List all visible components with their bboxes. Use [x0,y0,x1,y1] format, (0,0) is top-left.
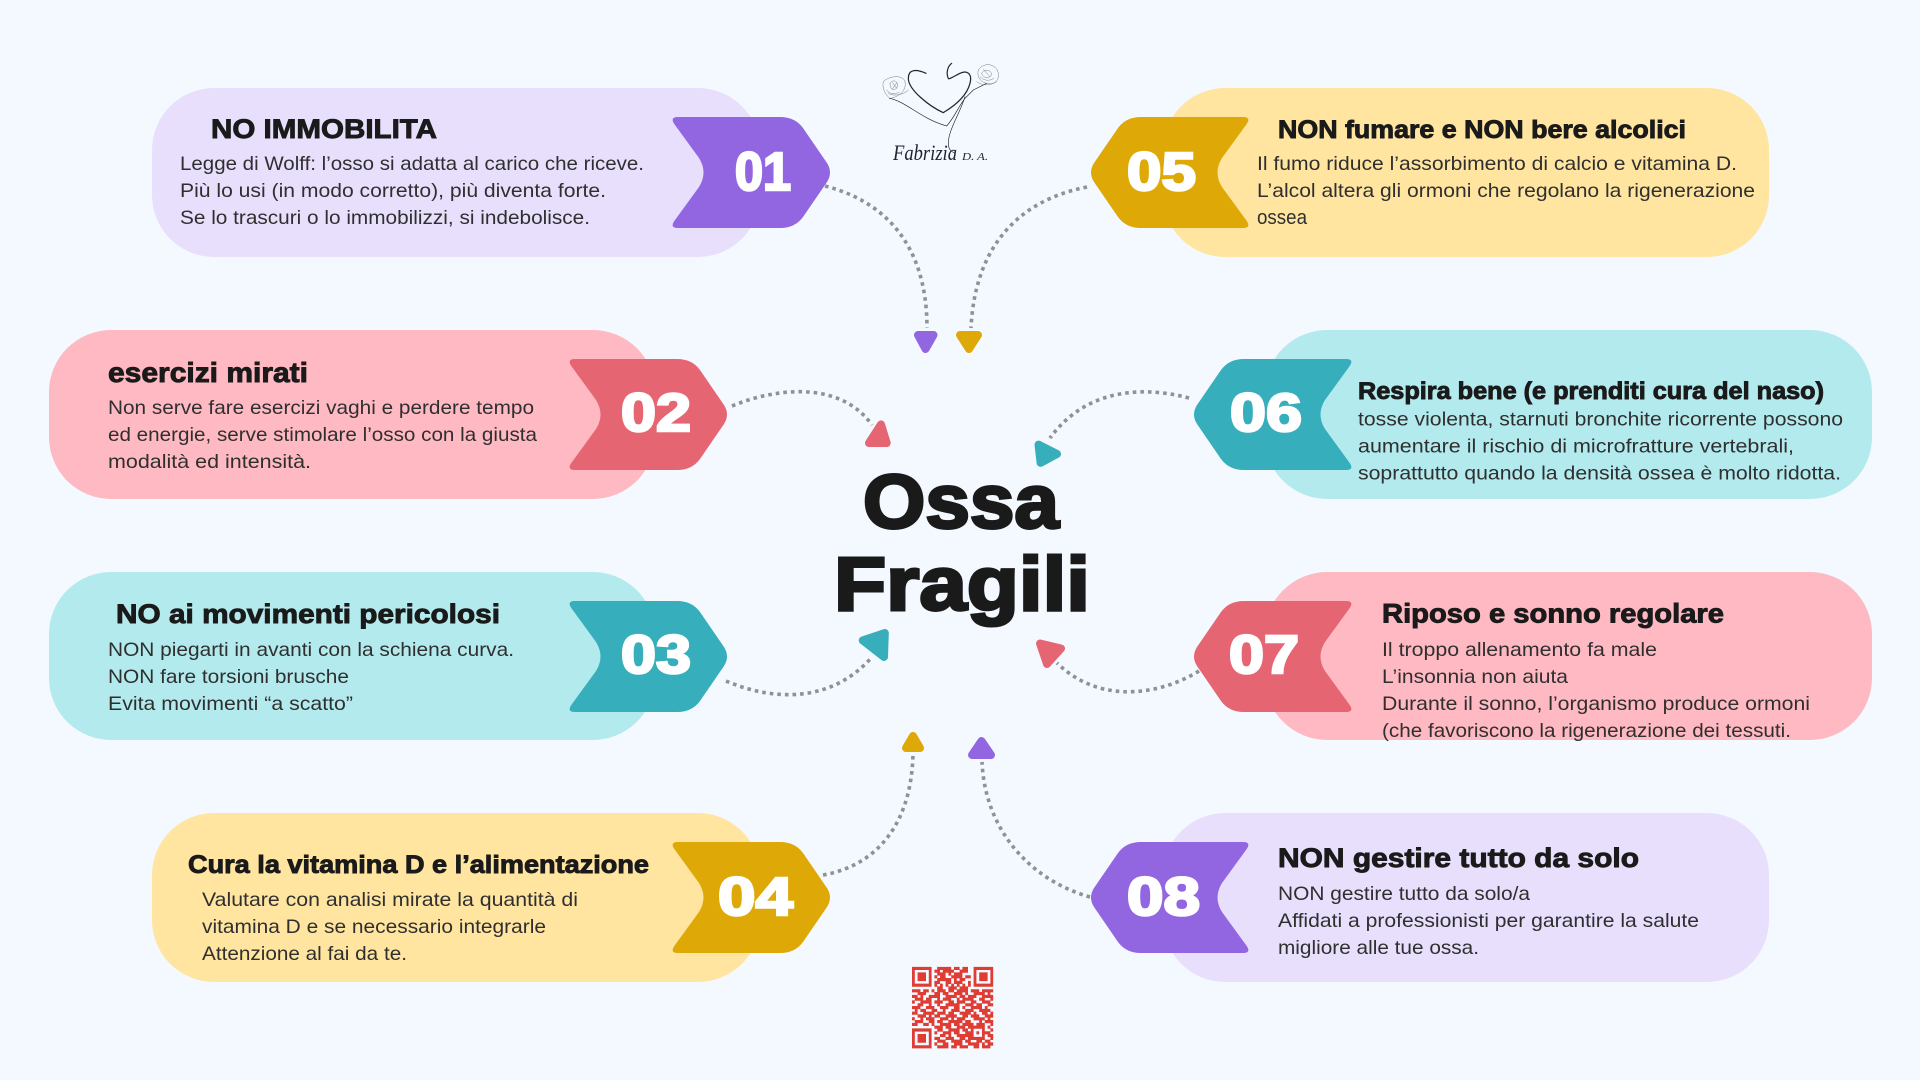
chevron badge 03: 03 [621,625,691,685]
arrow 02 [732,392,887,443]
QR code [912,968,993,1047]
panel background 07 [1265,572,1872,740]
panel: 05 non fumare [1091,88,1769,257]
body text 08: NON gestire tutto da solo/a [1278,883,1530,905]
body text 04: vitamina D e se necessario integrarle [202,916,546,938]
chevron badge 08 [1091,842,1248,953]
body text 01 [180,153,644,229]
logo drawing: heart and hands [883,63,998,153]
panel background 05 [1163,88,1769,257]
body text 05: ossea [1257,207,1308,229]
heading 05: NON fumare e NON bere alcolici [1278,116,1686,144]
chevron badge 05: 05 [1127,142,1196,202]
title: Ossa [863,460,1060,545]
chevron badge 04 [673,842,830,953]
body text 07: Il troppo allenamento fa male [1382,639,1657,661]
panel background 03 [49,572,655,740]
arrow 08 [972,741,1090,897]
arrow 05 [960,187,1087,349]
arrow 06 [1038,392,1189,463]
chevron badge 06 [1194,359,1351,470]
arrow 03 [726,633,885,695]
heading 06: Respira bene (e prenditi cura del naso) [1358,378,1824,405]
panel: 01 no immobilita [152,88,830,257]
chevron badge 06: 06 [1230,383,1302,443]
chevron badge 07 [1194,601,1351,712]
body text 06: aumentare il rischio di microfratture vertebrali, [1358,436,1794,458]
heading 03: NO ai movimenti pericolosi [116,599,500,629]
heading 01: NO IMMOBILITA [211,114,437,144]
body text 04: Attenzione al fai da te. [202,943,407,965]
chevron badge 07: 07 [1229,625,1299,685]
logo signature: Fabrizia [892,140,957,165]
body text 06: soprattutto quando la densità ossea è molto ridotta. [1358,462,1841,484]
body text 07: Durante il sonno, l’organismo produce ormoni [1382,693,1810,715]
panel: 03 no ai movimenti pericolosi [49,572,727,740]
chevron badge 02: 02 [621,383,691,443]
body text 05: Il fumo riduce l’assorbimento di calcio e vitamina D. [1257,153,1737,175]
arrow 01 [825,186,934,349]
body text 04: Valutare con analisi mirate la quantità di [202,889,578,911]
panel: 06 respira bene [1194,330,1872,499]
logo initials: D. A. [961,152,988,163]
chevron badge 02 [570,359,727,470]
body text 02: modalità ed intensità. [108,451,311,473]
heading 07: Riposo e sonno regolare [1382,598,1724,628]
chevron badge 04: 04 [718,867,793,927]
body text 04 [202,889,578,965]
chevron badge 01: 01 [735,142,791,202]
body text 01: Legge di Wolff: l’osso si adatta al carico che riceve. [180,153,644,175]
body text 02: Non serve fare esercizi vaghi e perdere tempo [108,397,534,419]
panel: 02 esercizi mirati [49,330,727,499]
body text 06: tosse violenta, starnuti bronchite ricorrente possono [1358,408,1843,430]
panel: 08 non gestire tutto da solo [1091,813,1769,982]
panel background 06 [1265,330,1872,499]
body text 08: migliore alle tue ossa. [1278,937,1479,959]
arrow 07 [1040,644,1199,692]
body text 03: NON fare torsioni brusche [108,666,349,688]
body text 08: Affidati a professionisti per garantire la salute [1278,910,1699,932]
body text 07 [1382,639,1810,742]
heading 02: esercizi mirati [108,357,308,388]
heading 04: Cura la vitamina D e l’alimentazione [188,851,649,879]
heading 08: NON gestire tutto da solo [1278,843,1639,873]
body text 02: ed energie, serve stimolare l’osso con la giusta [108,424,537,446]
panel background 08 [1163,813,1769,982]
panel: 04 vitamina D [152,813,830,982]
body text 01: Se lo trascuri o lo immobilizzi, si indebolisce. [180,207,590,229]
logo: Fabrizia D. A. [883,63,998,165]
body text 05 [1257,153,1755,229]
body text 02 [108,397,537,473]
title [834,460,1090,627]
chevron badge 01 [673,117,830,228]
body text 03: Evita movimenti “a scatto” [108,693,353,715]
body text 07: L’insonnia non aiuta [1382,666,1568,688]
body text 05: L’alcol altera gli ormoni che regolano la rigenerazione [1257,180,1755,202]
body text 07: (che favoriscono la rigenerazione dei tessuti. [1382,720,1791,742]
body text 08 [1278,883,1699,959]
body text 01: Più lo usi (in modo corretto), più diventa forte. [180,180,606,202]
arrow 04 [823,736,920,875]
panel background 01 [152,88,760,257]
chevron badge 05 [1091,117,1248,228]
body text 06 [1358,408,1843,484]
title: Fragili [834,542,1090,627]
chevron badge 08: 08 [1127,867,1200,927]
panel background 02 [49,330,655,499]
chevron badge 03 [570,601,727,712]
panel background 04 [152,813,760,982]
body text 03 [108,639,514,715]
panel: 07 riposo e sonno [1194,572,1872,742]
body text 03: NON piegarti in avanti con la schiena curva. [108,639,514,661]
